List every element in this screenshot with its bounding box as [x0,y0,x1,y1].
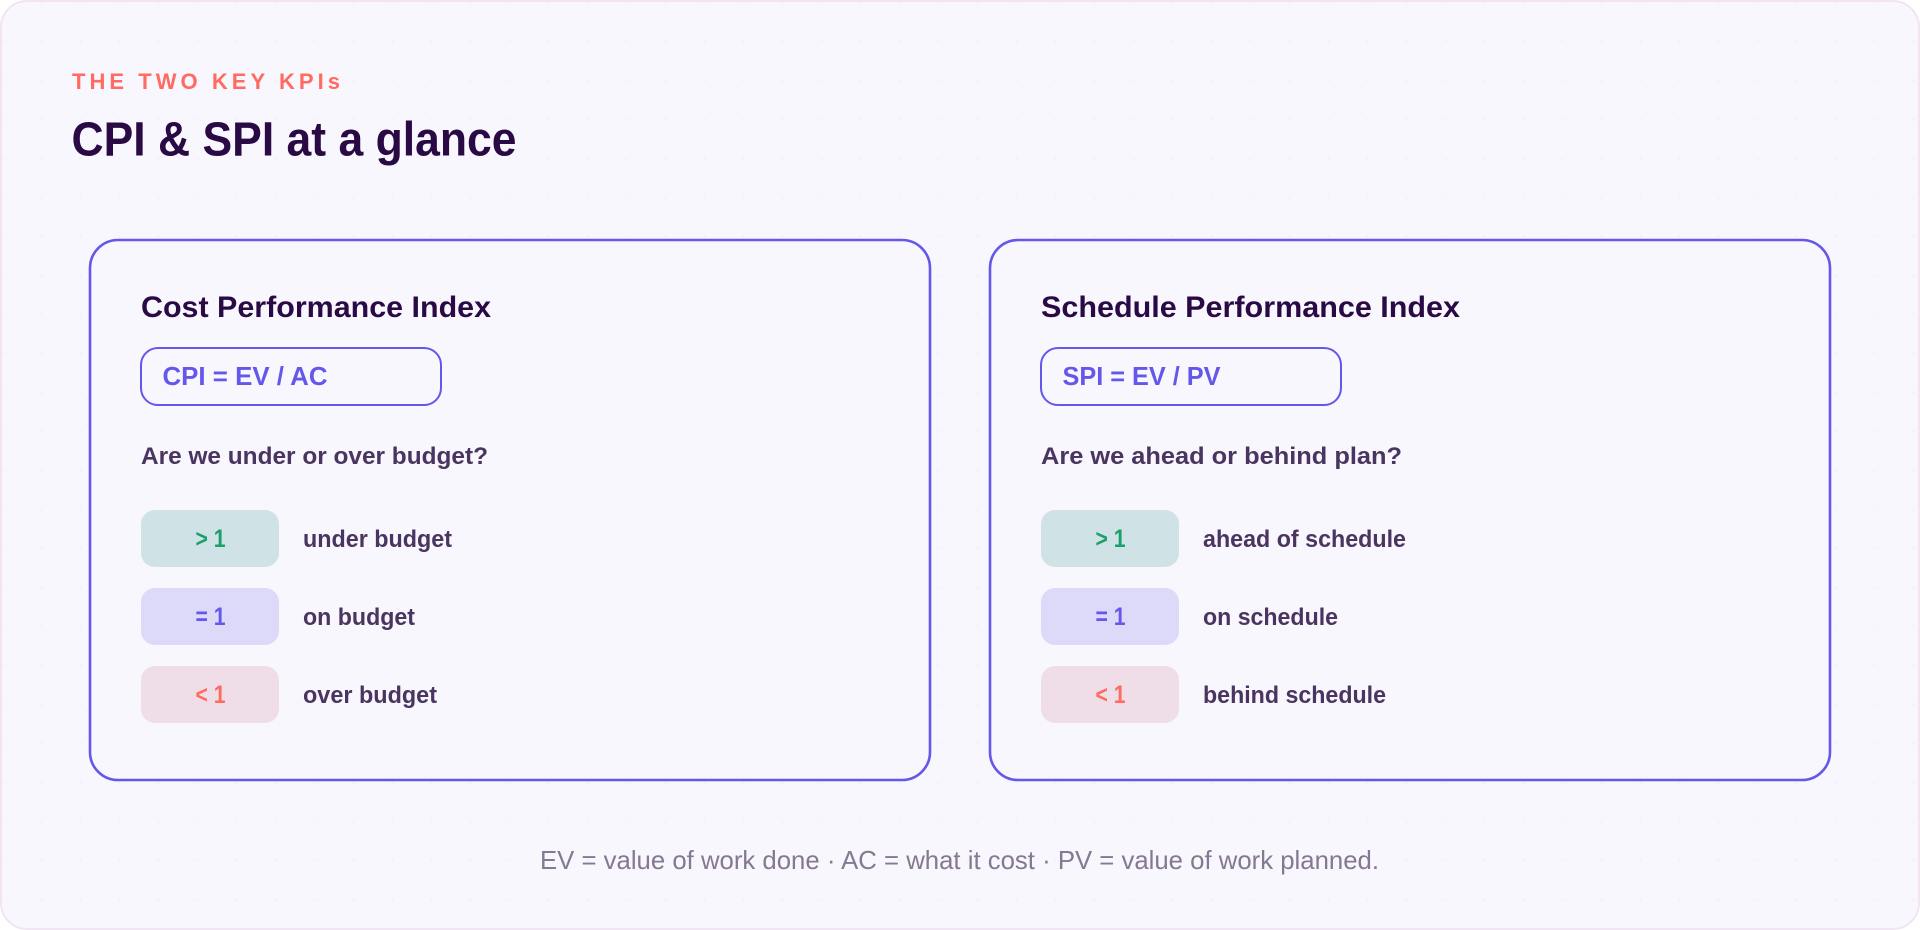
row: equal to one, on schedule: = 1 [1096,603,1126,631]
formula pill: CPI [141,348,441,405]
footnote: EV = value of work done · AC = what it cost · PV = value of work planned. [540,845,1379,875]
question: CPI: Are we under or over budget? [141,443,488,470]
panel heading: SPI: Schedule Performance Index [1041,291,1461,324]
row: equal to one, on budget: on budget [303,604,415,631]
title: CPI & SPI at a glance [72,114,516,166]
row: equal to one, on budget: = 1 [196,603,226,631]
row: greater than one, ahead of schedule: ahead of schedule [1203,526,1406,553]
panel heading: CPI: Cost Performance Index [141,291,492,324]
row: less than one, over budget: < 1 [196,681,226,709]
row: less than one, over budget [141,666,437,723]
formula pill: SPI: SPI = EV / PV [1062,361,1221,391]
panel: cost performance index [90,240,930,780]
row: greater than one, ahead of schedule: > 1 [1096,525,1126,553]
row: greater than one, under budget: > 1 [196,525,226,553]
row: less than one, behind schedule: < 1 [1096,681,1126,709]
question: SPI: Are we ahead or behind plan? [1041,443,1402,470]
row: equal to one, on budget [141,588,415,645]
row: greater than one, ahead of schedule [1041,510,1406,567]
row: equal to one, on schedule [1041,588,1338,645]
row: equal to one, on schedule: on schedule [1203,604,1338,631]
row: less than one, over budget: over budget [303,682,437,709]
row: less than one, behind schedule [1041,666,1386,723]
formula pill: CPI: CPI = EV / AC [162,361,328,391]
eyebrow label: THE TWO KEY KPIs [72,69,340,94]
panel: schedule performance index [990,240,1830,780]
formula pill: SPI [1041,348,1341,405]
row: less than one, behind schedule: behind schedule [1203,682,1386,709]
row: greater than one, under budget: under budget [303,526,452,553]
row: greater than one, under budget [141,510,452,567]
